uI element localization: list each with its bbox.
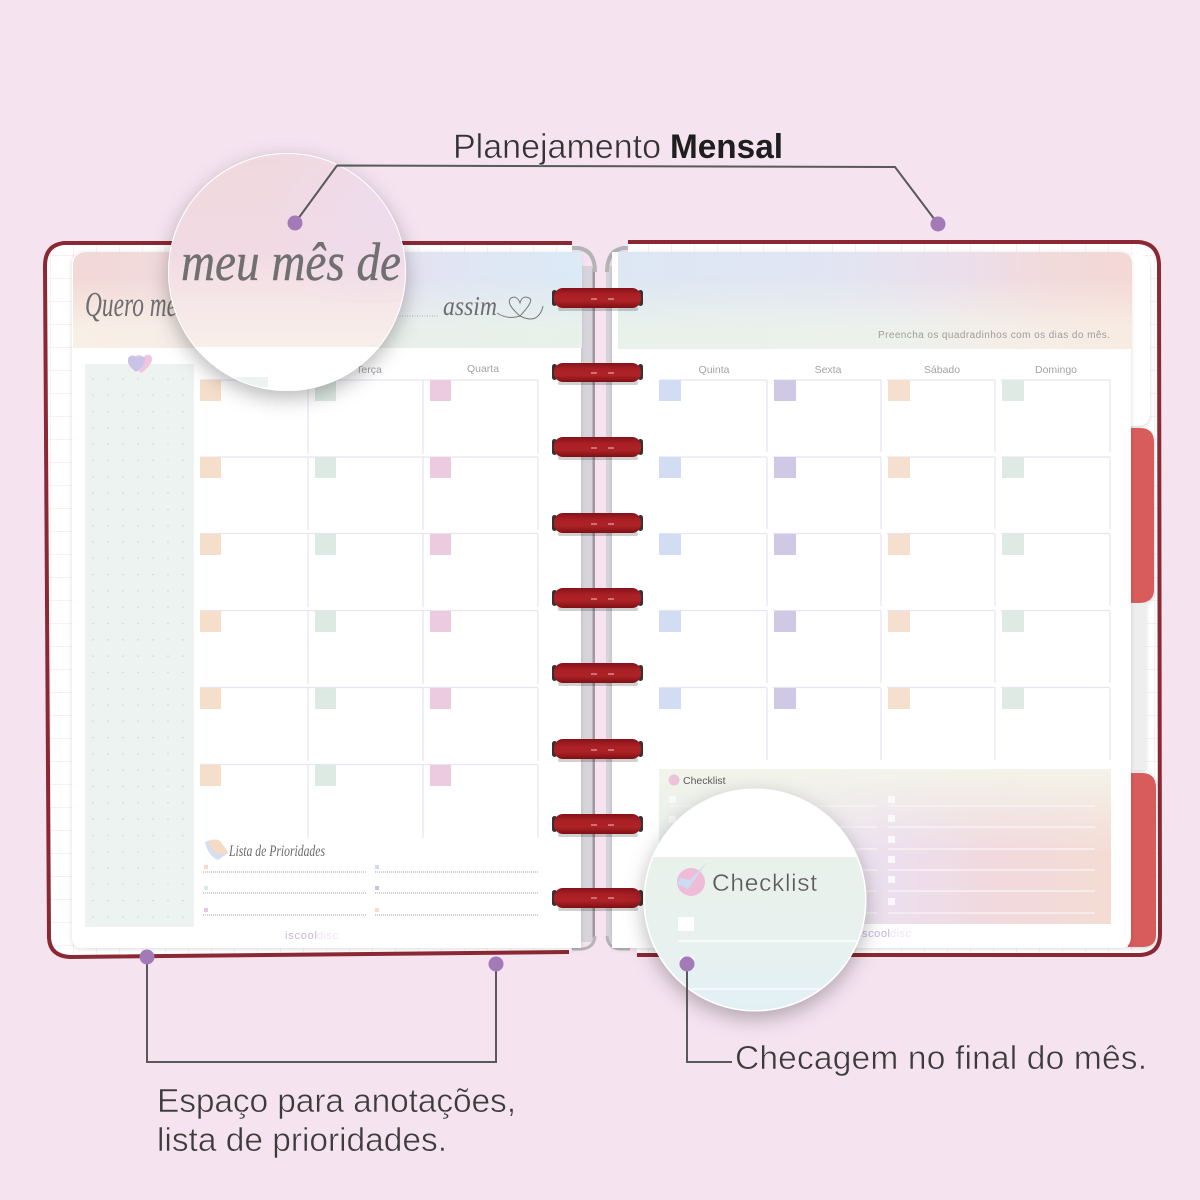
title [453,128,783,166]
checklist panel [659,769,1111,924]
right instruction text: Preencha os quadradinhos com os dias do mês. [878,330,1110,341]
ring 7 [552,739,643,762]
weekday labels right: Sexta [815,364,842,376]
connector: monthly planning [288,166,946,232]
weekday labels right: Quinta [699,364,730,376]
list title: Lista de Prioridades [228,843,325,860]
logo left: disc [317,930,338,942]
icon: check badge [677,862,707,896]
logo left: iscool [285,930,317,942]
heading script: assim with heart: assim [443,291,497,321]
ring 2 [552,363,643,385]
logo left [285,930,338,942]
right page [612,252,1131,948]
binder rings [552,288,643,911]
weekday labels right: Sábado [924,364,960,376]
left planner cover [45,243,572,957]
right page header [618,252,1132,349]
logo right: iscool [859,928,890,940]
ring 8 [552,814,643,837]
heading script: Quero me: Quero me [85,285,177,324]
calendar grid right [659,380,1110,760]
ring 5 [552,588,643,611]
list markers [204,865,379,912]
ring 6 [552,663,643,686]
ring 3 [552,437,643,460]
weekday labels left [356,363,499,376]
right planner cover [628,242,1160,955]
title: Planejamento [453,128,661,166]
list lines [203,872,538,915]
priorities list [203,840,538,915]
magnifier: checklist [644,788,866,1013]
weekday labels right: Domingo [1035,364,1077,376]
ring 1 [552,288,643,311]
connector: checklist [680,956,732,1062]
binder spine strips [572,248,630,949]
icon: folded notes [205,840,228,860]
checklist panel: Checklist [683,775,726,787]
weekday labels left: Terça [356,364,382,376]
caption: notes and priorities [157,1083,516,1159]
icon: hearts [128,355,152,373]
divider tabs [1125,254,1156,947]
logo right [859,928,912,940]
ring 4 [552,513,643,536]
magnified script text: meu mês de [181,232,401,292]
left page header [73,252,582,348]
caption: end of month check: Checagem no final do mês. [735,1040,1147,1077]
caption: notes and priorities: Espaço para anotações, [157,1083,516,1120]
heading script: assim with heart [397,291,543,321]
caption: notes and priorities: lista de prioridades. [157,1122,447,1159]
title: Mensal [670,128,783,166]
sidebar notes panel [85,364,194,927]
weekday labels left: Quarta [467,363,499,375]
weekday labels right [699,364,1077,376]
calendar grid left [200,380,538,838]
ring 9 [552,888,643,911]
left page [72,252,581,948]
logo right: disc [890,928,912,940]
magnifier: meu mes de [168,153,406,391]
connector: notes and priorities [140,950,504,1062]
magnified checklist label: Checklist [712,870,817,897]
